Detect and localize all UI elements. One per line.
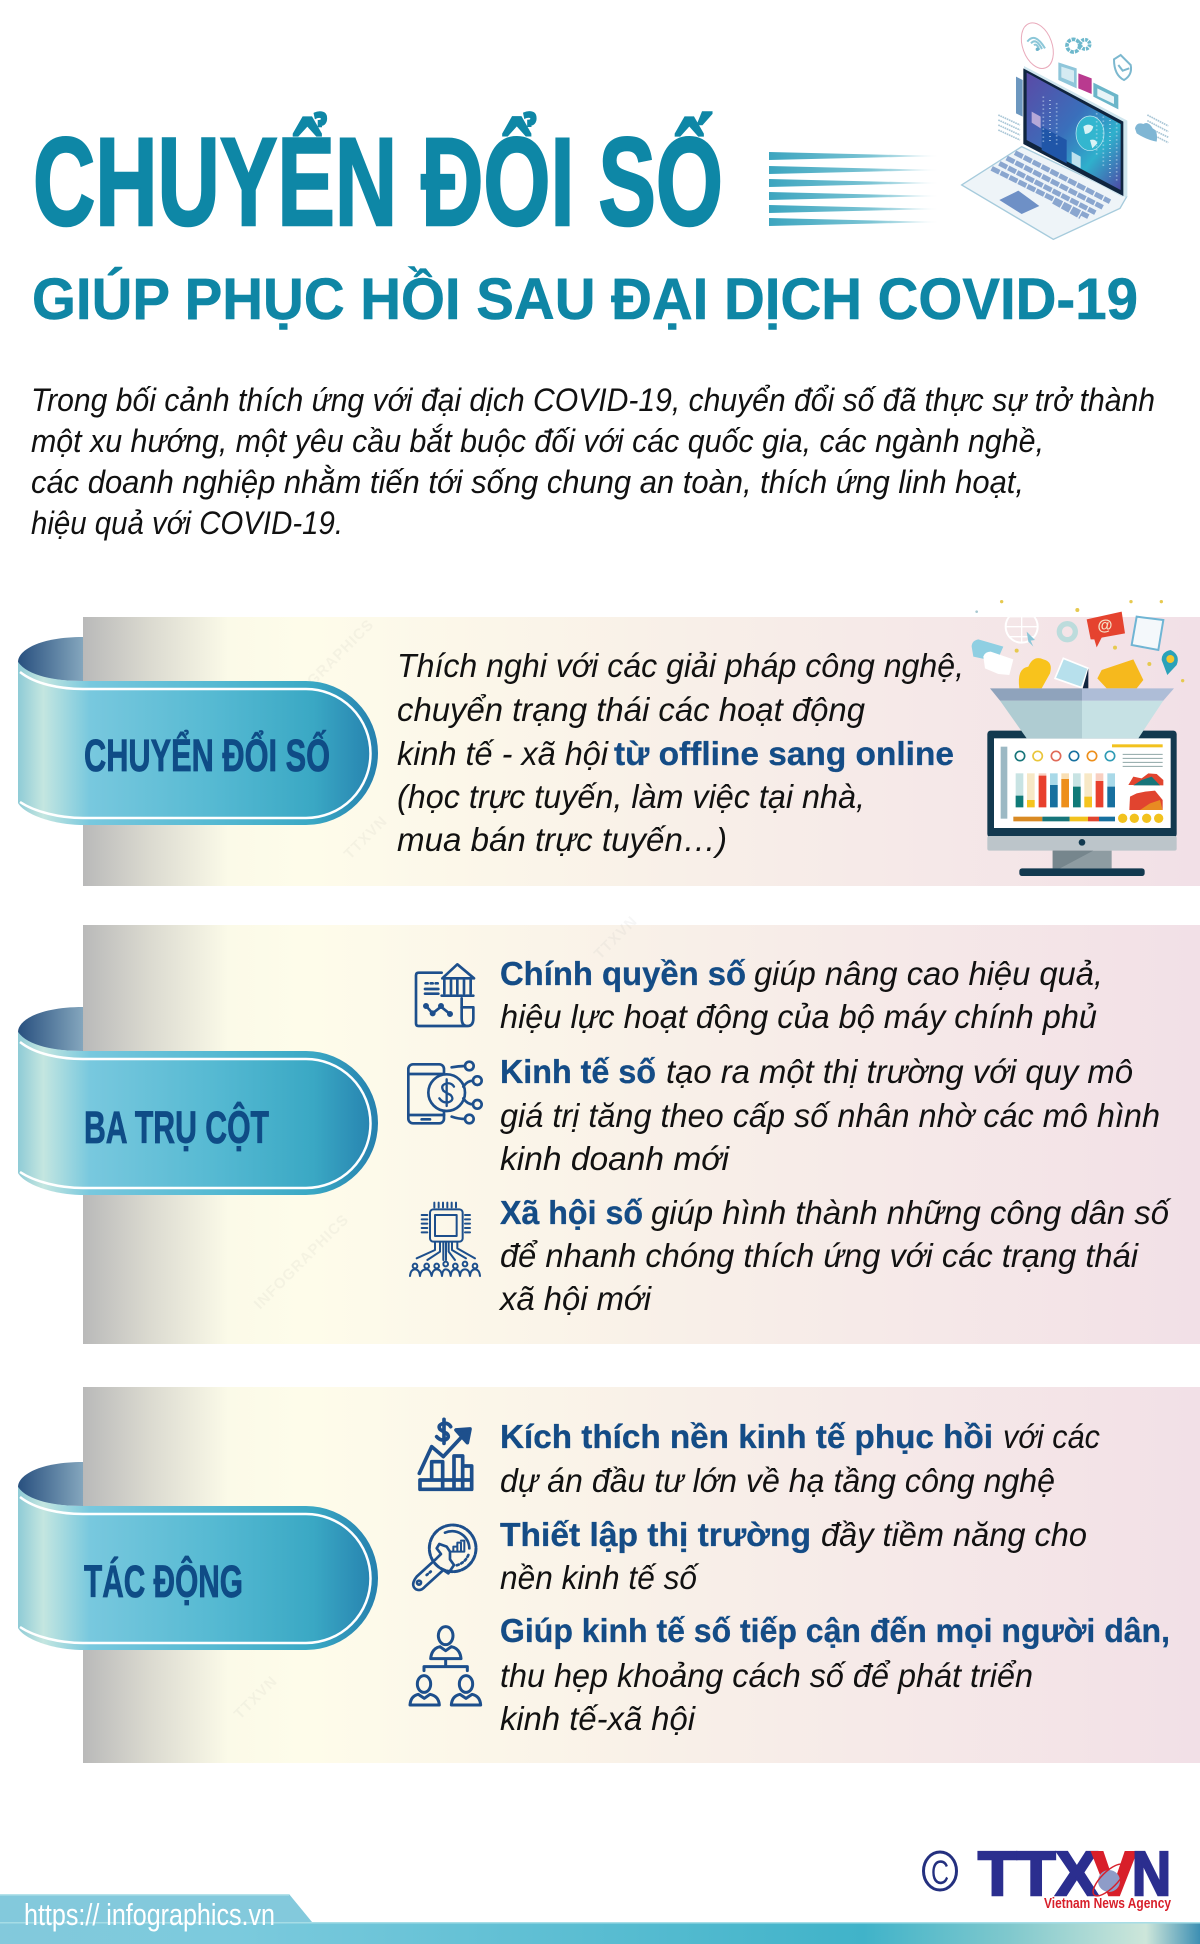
ribbon: tác động bbox=[18, 1462, 378, 1650]
floating items bbox=[972, 600, 1184, 688]
logo: TTXVN: N bbox=[1132, 1840, 1171, 1909]
ribbon: chuyển đổi số: CHUYỂN ĐỔI SỐ bbox=[84, 730, 330, 781]
logo: TTXVN: V bbox=[1092, 1840, 1136, 1909]
laptop body bbox=[962, 66, 1127, 239]
panel: chuyển đổi số: TTXVN bbox=[341, 813, 391, 863]
panel: chuyển đổi số: INFOGRAPHICS bbox=[276, 616, 378, 718]
text: xã hội số: Xã hội số bbox=[500, 1194, 643, 1231]
intro paragraph: hiệu quả với COVID-19. bbox=[31, 505, 343, 541]
text: thiết lập thị trường: nền kinh tế số bbox=[500, 1559, 700, 1596]
floating items: @ bbox=[1098, 618, 1113, 635]
ribbon: tác động: TÁC ĐỘNG bbox=[84, 1556, 243, 1607]
icon: people network bbox=[410, 1627, 481, 1705]
intro paragraph: các doanh nghiệp nhằm tiến tới sống chung an toàn, thích ứng linh hoạt, bbox=[31, 464, 1024, 500]
panel text: Thích nghi với các giải pháp công nghệ, bbox=[397, 647, 964, 684]
text: thiết lập thị trường: đầy tiềm năng cho bbox=[821, 1516, 1087, 1553]
text: xã hội số bbox=[498, 1194, 1172, 1317]
icon: data funnel and monitor bbox=[972, 600, 1184, 876]
intro paragraph: một xu hướng, một yêu cầu bắt buộc đối với các quốc gia, các ngành nghề, bbox=[31, 423, 1044, 459]
text: kinh tế số: kinh doanh mới bbox=[500, 1140, 731, 1177]
text: kinh tế số bbox=[500, 1053, 1160, 1177]
gears bbox=[1067, 39, 1090, 52]
text: xã hội số: xã hội mới bbox=[498, 1280, 653, 1317]
panel: ba trụ cột: INFOGRAPHICS bbox=[251, 1211, 353, 1313]
subtitle: GIÚP PHỤC HỒI SAU ĐẠI DỊCH COVID-19 bbox=[32, 267, 1138, 332]
text: kích thích nền kinh tế bbox=[500, 1418, 1100, 1499]
panel: ba trụ cột bbox=[18, 913, 1200, 1344]
copyright symbol: C bbox=[931, 1854, 949, 1892]
text: kích thích nền kinh tế: dự án đầu tư lớn về hạ tầng công nghệ bbox=[500, 1462, 1055, 1499]
text: kinh tế số: Kinh tế số bbox=[500, 1053, 656, 1090]
icon: growth chart bbox=[419, 1419, 472, 1489]
ribbon: chuyển đổi số bbox=[18, 637, 378, 825]
footer bar bbox=[0, 1894, 1200, 1944]
intro paragraph: Trong bối cảnh thích ứng với đại dịch COVID-19, chuyển đổi số đã thực sự trở thành bbox=[31, 382, 1155, 418]
text: kích thích nền kinh tế: với các bbox=[1003, 1418, 1100, 1455]
text: xã hội số: giúp hình thành những công dân số bbox=[651, 1194, 1172, 1231]
wifi ring bbox=[1015, 18, 1059, 73]
text: giúp kinh tế số bbox=[500, 1612, 1170, 1737]
text: xã hội số: để nhanh chóng thích ứng với các trạng thái bbox=[500, 1237, 1140, 1274]
text: chính quyền số bbox=[500, 955, 1103, 1035]
panel text bbox=[397, 647, 964, 858]
text: kích thích nền kinh tế: Kích thích nền kinh tế phục hồi bbox=[500, 1418, 993, 1455]
panel text: kinh tế - xã hội bbox=[397, 735, 610, 772]
logo: TTXVN: TTX bbox=[978, 1840, 1098, 1909]
text: thiết lập thị trường bbox=[500, 1516, 1087, 1596]
text: giúp kinh tế số: kinh tế-xã hội bbox=[500, 1700, 697, 1737]
floating app cards bbox=[1058, 62, 1118, 109]
icon: digital economy bbox=[408, 1062, 482, 1123]
keyboard bbox=[992, 153, 1110, 217]
text: giúp kinh tế số: Giúp kinh tế số tiếp cận đến mọi người dân, bbox=[500, 1612, 1170, 1649]
ribbon: ba trụ cột: BA TRỤ CỘT bbox=[84, 1102, 269, 1153]
icon: laptop illustration bbox=[962, 18, 1168, 239]
ribbon: ba trụ cột bbox=[18, 1007, 378, 1195]
panel: chuyển đổi số bbox=[18, 600, 1200, 886]
funnel bbox=[990, 688, 1174, 738]
panel text: từ offline sang online bbox=[614, 735, 954, 772]
panel: ba trụ cột: TTXVN bbox=[591, 913, 641, 963]
text: chính quyền số: Chính quyền số bbox=[500, 955, 746, 992]
side panel and data lines bbox=[998, 77, 1168, 143]
page title: CHUYỂN ĐỔI SỐ bbox=[33, 113, 723, 252]
icon: digital government bbox=[416, 964, 474, 1026]
speed lines bbox=[769, 152, 940, 226]
website url: https:// infographics.vn bbox=[24, 1897, 275, 1932]
dashboard bars bbox=[1001, 744, 1163, 823]
shield bbox=[1114, 55, 1131, 80]
cloud bbox=[1135, 123, 1157, 142]
text: chính quyền số: hiệu lực hoạt động của bộ máy chính phủ bbox=[500, 998, 1097, 1035]
panel: tác động bbox=[18, 1387, 1200, 1763]
monitor bbox=[987, 731, 1177, 876]
panel text: mua bán trực tuyến…) bbox=[397, 821, 727, 858]
icon: gear and wrench bbox=[413, 1525, 476, 1590]
logo: TTXVN bbox=[978, 1840, 1172, 1912]
trackpad bbox=[999, 191, 1039, 214]
logo: TTXVN: Vietnam News Agency bbox=[1044, 1895, 1172, 1912]
panel text: chuyển trạng thái các hoạt động bbox=[397, 691, 866, 728]
text: kinh tế số: giá trị tăng theo cấp số nhân nhờ các mô hình bbox=[500, 1097, 1160, 1134]
panel text: (học trực tuyến, làm việc tại nhà, bbox=[397, 778, 865, 815]
text: thiết lập thị trường: Thiết lập thị trường bbox=[500, 1516, 811, 1553]
text: giúp kinh tế số: thu hẹp khoảng cách số để phát triển bbox=[500, 1657, 1033, 1694]
text: chính quyền số: giúp nâng cao hiệu quả, bbox=[754, 955, 1103, 992]
panel: tác động: TTXVN bbox=[231, 1673, 281, 1723]
intro paragraph bbox=[31, 382, 1155, 541]
text: kinh tế số: tạo ra một thị trường với quy mô bbox=[666, 1053, 1133, 1090]
icon: digital society bbox=[410, 1203, 480, 1276]
